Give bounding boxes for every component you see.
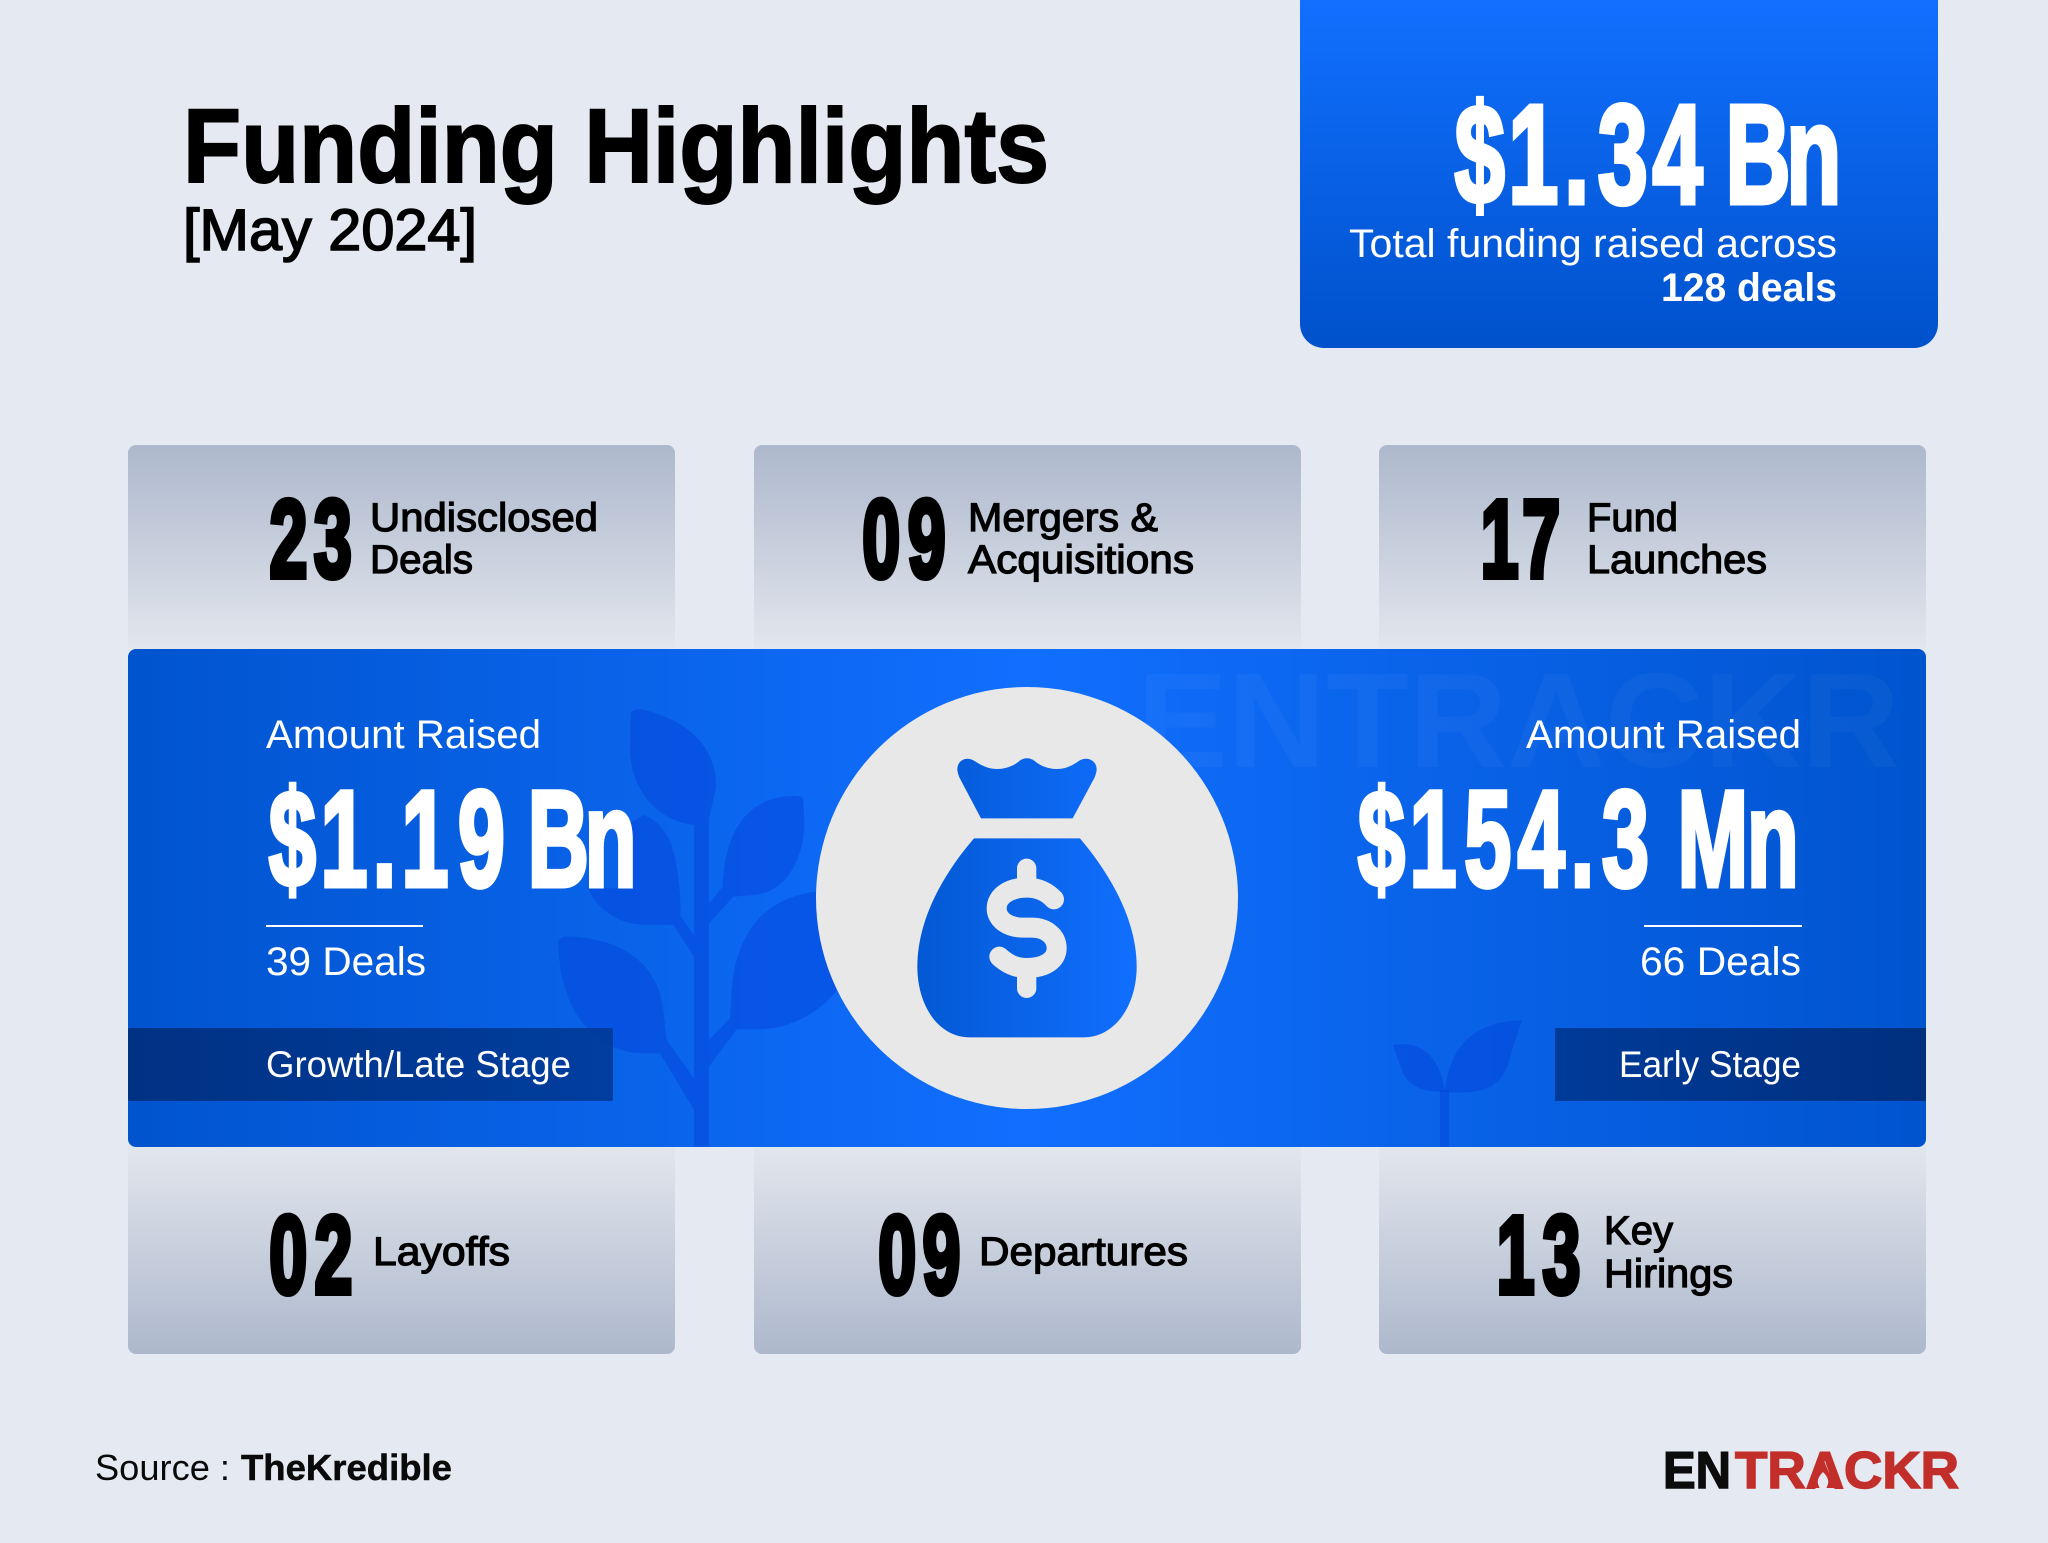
card: fund launches: Launches — [1587, 538, 1767, 582]
card: key hirings — [1379, 1143, 1926, 1354]
growth stage figures: 39 Deals — [266, 940, 426, 984]
icon: money bag — [917, 758, 1137, 1037]
tab: early stage: Early Stage — [1619, 1044, 1801, 1085]
watermark: ENTRACKR — [1137, 645, 1900, 796]
icon: large plant — [558, 709, 840, 1147]
title: [May 2024] — [183, 198, 477, 263]
panel: total funding — [1300, 0, 1938, 348]
card: fund launches — [1379, 445, 1926, 653]
early stage figures: 66 Deals — [1640, 940, 1801, 984]
growth stage figures: $1.19 Bn — [269, 763, 637, 916]
card: mergers and acquisitions: 09 — [862, 478, 946, 601]
title — [183, 88, 1049, 263]
title: Funding Highlights — [183, 88, 1049, 205]
card: mergers and acquisitions: Acquisitions — [968, 538, 1194, 582]
card: departures — [754, 1143, 1301, 1354]
card: undisclosed deals: Undisclosed — [370, 496, 598, 540]
card: mergers and acquisitions: Mergers & — [968, 496, 1158, 540]
logo: Entrackr: TRACKR — [1735, 1442, 1959, 1500]
card: undisclosed deals: 23 — [269, 478, 352, 601]
card: mergers and acquisitions — [754, 445, 1301, 653]
source credit — [95, 1447, 452, 1488]
card: layoffs: Layoffs — [373, 1230, 510, 1274]
source credit: Source : — [95, 1447, 230, 1488]
early stage figures — [1358, 713, 1802, 984]
card: layoffs: 02 — [269, 1194, 352, 1317]
tab: early stage — [1555, 1028, 1926, 1101]
card: layoffs — [128, 1143, 675, 1354]
early stage figures: Amount Raised — [1526, 713, 1801, 757]
logo: Entrackr: EN — [1663, 1442, 1731, 1500]
tab: growth stage — [128, 1028, 613, 1101]
panel: central funding band — [128, 645, 1926, 1147]
panel: total funding: $1.34 Bn — [1455, 77, 1841, 234]
card: key hirings: 13 — [1497, 1194, 1580, 1317]
growth stage figures — [266, 713, 637, 984]
card: departures: Departures — [979, 1230, 1188, 1274]
source credit: TheKredible — [241, 1447, 452, 1488]
panel: total funding: 128 deals — [1661, 266, 1837, 310]
early stage figures: $154.3 Mn — [1358, 763, 1799, 916]
card: undisclosed deals: Deals — [370, 538, 473, 582]
card: key hirings: Hirings — [1604, 1252, 1733, 1296]
tab: growth stage: Growth/Late Stage — [266, 1044, 571, 1085]
card: departures: 09 — [878, 1194, 960, 1317]
circle — [816, 687, 1238, 1109]
card: fund launches: Fund — [1587, 496, 1678, 540]
card: undisclosed deals — [128, 445, 675, 653]
card: key hirings: Key — [1604, 1209, 1673, 1253]
card: fund launches: 17 — [1481, 478, 1560, 601]
icon: small plant — [1393, 1020, 1522, 1147]
panel: total funding: Total funding raised across — [1349, 222, 1837, 266]
growth stage figures: Amount Raised — [266, 713, 541, 757]
